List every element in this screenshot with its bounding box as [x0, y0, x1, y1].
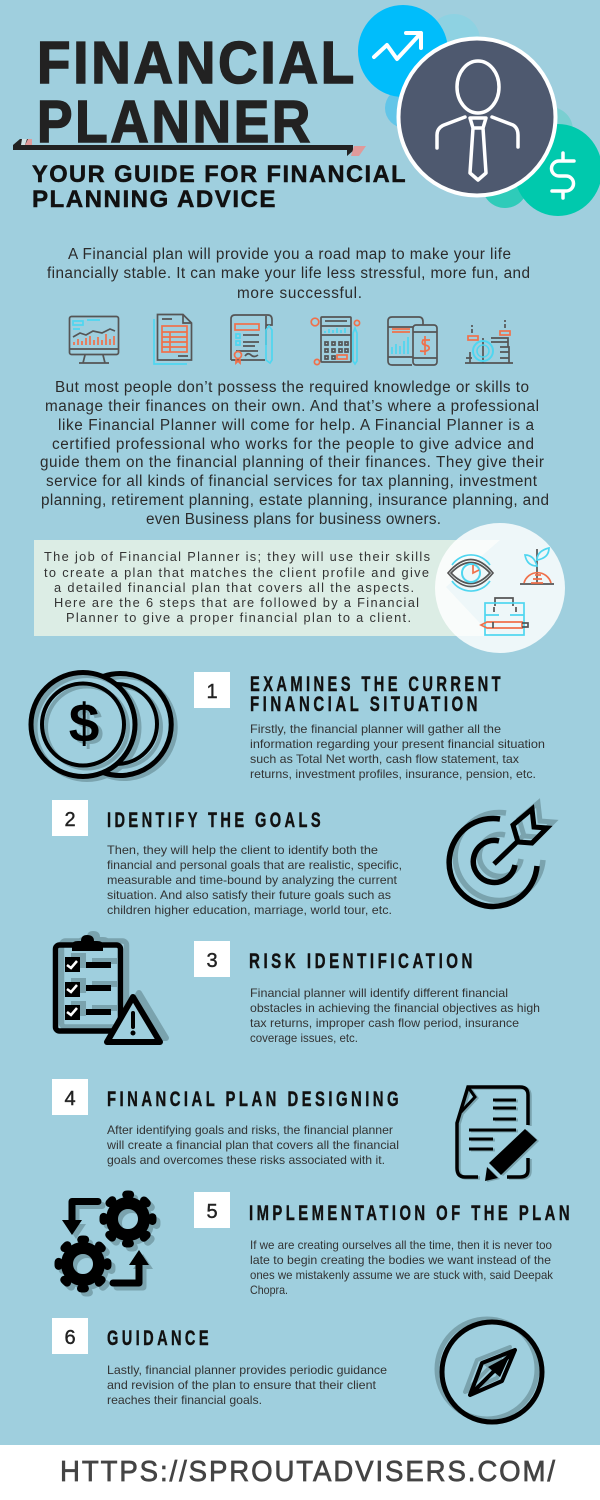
body 5: ones we mistakenly assume we are stuck with, said Deepak: [250, 1268, 554, 1282]
heading 1: FINANCIAL SITUATION: [250, 692, 481, 716]
body 2: financial and personal goals that are realistic, specific,: [107, 858, 402, 872]
body 1: [250, 722, 545, 781]
icon: gears and arrows: [58, 1194, 152, 1288]
body 1: information regarding your present financial situation: [250, 737, 545, 751]
body 5: If we are creating ourselves all the time, then it is never too: [250, 1238, 552, 1252]
icon: coins: [31, 672, 171, 776]
number badge 6: 6: [64, 1327, 76, 1349]
number badge 4: [52, 1079, 88, 1115]
number badge 3: 3: [206, 950, 218, 972]
body 1: Firstly, the financial planner will gather all the: [250, 722, 501, 736]
body 4: After identifying goals and risks, the financial planner: [107, 1123, 393, 1137]
icon: plant on coins: [520, 548, 554, 584]
body 3: obstacles in achieving the financial objectives as high: [250, 1001, 540, 1015]
heading 4: FINANCIAL PLAN DESIGNING: [107, 1087, 402, 1111]
body 2: situation. And also satisfy their future goals such as: [107, 888, 391, 902]
icon: compass: [442, 1322, 542, 1422]
paragraph text: manage their finances on their own. And that’s where a professional: [45, 398, 539, 415]
number badge 2: [52, 800, 88, 836]
header illustration: advisor and circles: [358, 5, 600, 216]
body 6: [107, 1363, 387, 1407]
body 4: goals and overcomes these risks associated with it.: [107, 1153, 385, 1167]
icon: coins: $: [69, 692, 99, 754]
number badge 3: [194, 941, 230, 977]
heading 1: [250, 672, 504, 716]
callout text: Here are the 6 steps that are followed by a Financial: [54, 595, 419, 610]
number badge 4: 4: [64, 1088, 76, 1110]
intro text: financially stable. It can make your life less stressful, more fun, and: [47, 265, 530, 282]
body 6: reaches their financial goals.: [107, 1393, 262, 1407]
step 2: [52, 800, 547, 917]
intro text: more successful.: [237, 285, 362, 302]
title: PLANNER: [37, 89, 313, 155]
body 2: children higher education, marriage, world tour, etc.: [107, 903, 392, 917]
number badge 2: 2: [64, 809, 76, 831]
icon: spreadsheet document: [154, 314, 192, 364]
icon row: finance line icons: [70, 314, 513, 365]
paragraph text: guide them on the financial planning of their finances. They give their: [40, 454, 544, 471]
title: FINANCIAL: [37, 30, 357, 96]
icon: phones with dollar: [388, 317, 437, 365]
callout text: a detailed financial plan that covers all the aspects.: [54, 580, 414, 595]
body 2: Then, they will help the client to identify both the: [107, 843, 378, 857]
body 3: coverage issues, etc.: [250, 1031, 358, 1045]
paragraph text: [40, 379, 549, 528]
paragraph text: planning, retirement planning, estate planning, insurance planning, and: [41, 492, 549, 509]
step 5: [58, 1192, 573, 1297]
step 6: [52, 1318, 542, 1422]
body 3: [250, 986, 540, 1045]
body 5: late to begin creating the bodies we want instead of the: [250, 1253, 551, 1267]
icon: calculator and pen: [311, 317, 360, 365]
body 3: tax returns, improper cash flow period, insurance: [250, 1016, 519, 1030]
body 5: [250, 1238, 554, 1297]
body 6: and revision of the plan to ensure that their client: [107, 1378, 377, 1392]
body 1: such as Total Net worth, cash flow statement, tax: [250, 752, 519, 766]
step 4: [52, 1079, 537, 1181]
icon: document and pencil: [457, 1087, 537, 1181]
heading 3: RISK IDENTIFICATION: [249, 949, 476, 973]
paragraph text: like Financial Planner will come for help. A Financial Planner is a: [58, 417, 534, 434]
number badge 5: [194, 1192, 230, 1228]
icon: coin stacks: [465, 320, 513, 363]
icon: target and arrow: [449, 809, 547, 906]
callout panel: [34, 523, 565, 653]
number badge 6: [52, 1318, 88, 1354]
paragraph text: But most people don’t possess the required knowledge or skills to: [55, 379, 529, 396]
number badge 1: [194, 672, 230, 708]
body 4: [106, 1123, 399, 1167]
body 5: Chopra.: [250, 1283, 288, 1297]
icon: contract and pen: [231, 315, 272, 363]
callout text: The job of Financial Planner is; they will use their skills: [44, 549, 430, 564]
title ribbon underline: [13, 139, 366, 156]
body 3: Financial planner will identify different financial: [250, 986, 508, 1000]
body 1: returns, investment profiles, insurance, pension, etc.: [250, 767, 536, 781]
body 4: will create a financial plan that covers all the financial: [106, 1138, 399, 1152]
icon: checklist with warning: [56, 935, 160, 1042]
callout text: [44, 549, 430, 625]
icon: monitor chart: [70, 316, 118, 363]
paragraph text: even Business plans for business owners.: [146, 511, 441, 528]
callout text: to create a plan that matches the client profile and give: [44, 565, 429, 580]
number badge 5: 5: [206, 1201, 218, 1223]
body 2: measurable and time-bound by analyzing the current: [107, 873, 398, 887]
footer band with URL: [0, 1445, 600, 1500]
subtitle: YOUR GUIDE FOR FINANCIAL: [32, 161, 407, 188]
paragraph text: service for all kinds of financial services for tax planning, investment: [46, 473, 538, 490]
paragraph text: certified professional who works for the people to give advice and: [52, 436, 534, 453]
intro text: [47, 246, 530, 302]
title: [37, 30, 357, 155]
callout text: Planner to give a proper financial plan to a client.: [66, 610, 411, 625]
footer band with URL: HTTPS://SPROUTADVISERS.COM/: [60, 1456, 557, 1488]
number badge 1: 1: [206, 681, 218, 703]
icon: briefcase and pen: [481, 598, 528, 635]
intro text: A Financial plan will provide you a road map to make your life: [68, 246, 511, 263]
heading 6: GUIDANCE: [107, 1326, 212, 1350]
heading 2: IDENTIFY THE GOALS: [107, 808, 324, 832]
body 2: [107, 843, 402, 917]
step 1: [31, 672, 545, 781]
step 3: [56, 935, 540, 1045]
body 6: Lastly, financial planner provides periodic guidance: [107, 1363, 387, 1377]
subtitle: PLANNING ADVICE: [32, 186, 277, 213]
icon: eye with chart: [448, 555, 493, 591]
subtitle: [32, 161, 407, 213]
